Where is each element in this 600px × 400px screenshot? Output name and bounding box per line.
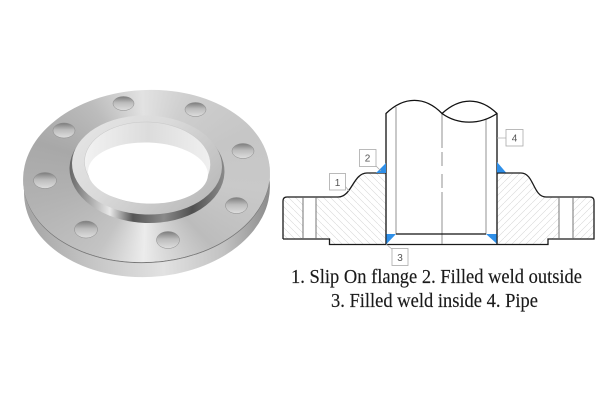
- label 1: [330, 174, 349, 191]
- raised hub: [68, 113, 226, 226]
- label 4: 4: [512, 134, 518, 144]
- weld 3 inside: [386, 234, 496, 244]
- caption: [291, 266, 582, 312]
- flange photo: [20, 86, 274, 283]
- bolt holes: [34, 96, 254, 248]
- flange top face: [20, 86, 274, 266]
- weld 2 outside: [376, 162, 506, 173]
- label 1: 1: [335, 178, 341, 189]
- caption line 2: 3. Filled weld inside 4. Pipe: [331, 290, 538, 312]
- cross-section diagram: [283, 100, 594, 266]
- flange section: [283, 173, 594, 244]
- bore opening: [83, 120, 212, 206]
- label 2: 2: [365, 154, 371, 164]
- label 3: [386, 244, 408, 266]
- pipe: [386, 100, 497, 244]
- label 3: 3: [397, 253, 403, 264]
- label 2: [360, 150, 381, 171]
- caption line 1: 1. Slip On flange 2. Filled weld outside: [291, 266, 582, 288]
- label 4: [497, 130, 523, 146]
- flange outer side wall: [20, 97, 274, 283]
